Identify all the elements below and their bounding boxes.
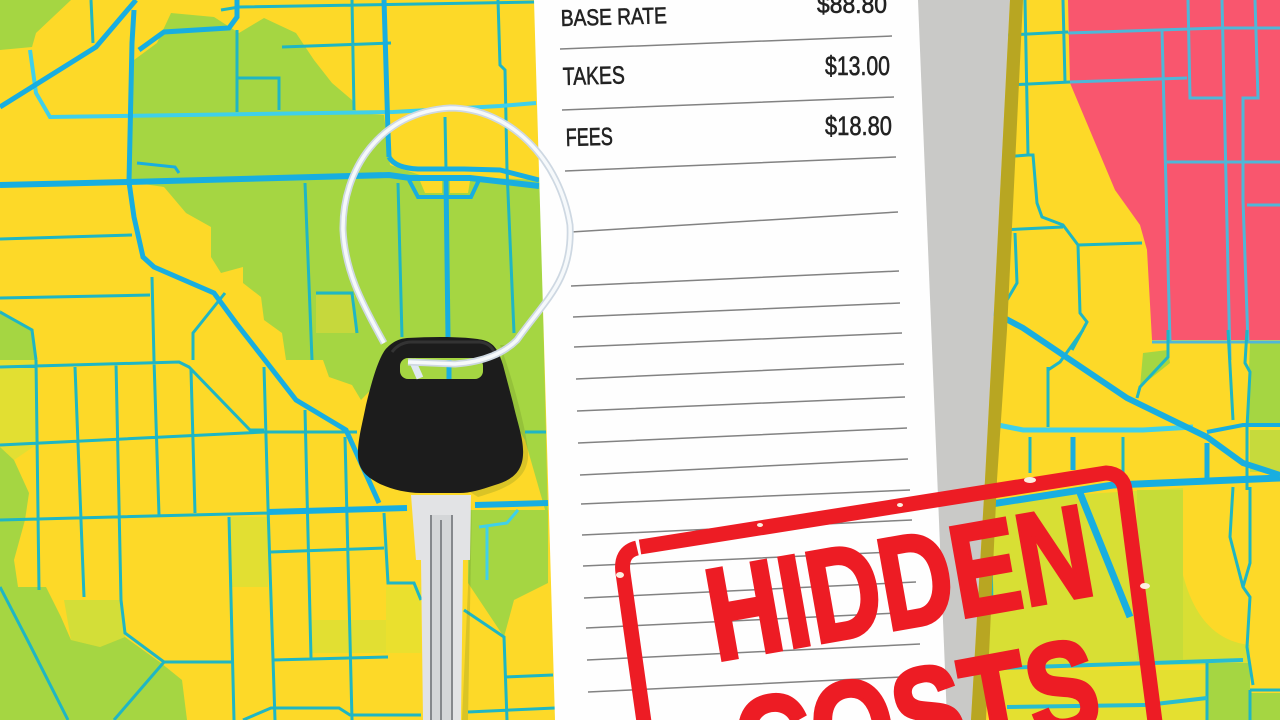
receipt lines bbox=[560, 36, 922, 692]
key shadow bbox=[462, 345, 528, 720]
key head bbox=[358, 337, 523, 493]
receipt row: fees: FEES bbox=[565, 123, 613, 152]
map: interchange with yellow cells bbox=[409, 180, 479, 197]
map: lime tinted areas bbox=[0, 360, 1280, 720]
receipt row: taxes: TAKES bbox=[562, 61, 625, 91]
key bbox=[343, 108, 570, 720]
shadow edge on map bbox=[971, 0, 1023, 720]
map: pink zone bbox=[1068, 0, 1280, 340]
receipt row: taxes bbox=[562, 51, 890, 91]
receipt shadow panel bbox=[915, 0, 1010, 720]
stamp text: HIDDEN bbox=[695, 476, 1103, 689]
map: pink zone streets bbox=[1068, 0, 1280, 360]
receipt row: base rate bbox=[560, 0, 887, 31]
receipt row: base rate: BASE RATE bbox=[560, 2, 667, 31]
stamp wear specks bbox=[616, 477, 1150, 589]
receipt row: fees bbox=[565, 111, 892, 152]
receipt row: taxes: $13.00 bbox=[825, 51, 890, 81]
key head slot bbox=[400, 358, 483, 379]
stamp text bbox=[695, 476, 1110, 720]
key blade bbox=[411, 495, 471, 720]
receipt paper bbox=[534, 0, 947, 720]
stamp border bbox=[623, 473, 1155, 720]
receipt bbox=[534, 0, 1023, 720]
stamp: hidden costs bbox=[616, 473, 1155, 720]
key ring loop bbox=[343, 108, 570, 364]
receipt row: fees: $18.80 bbox=[825, 111, 892, 141]
